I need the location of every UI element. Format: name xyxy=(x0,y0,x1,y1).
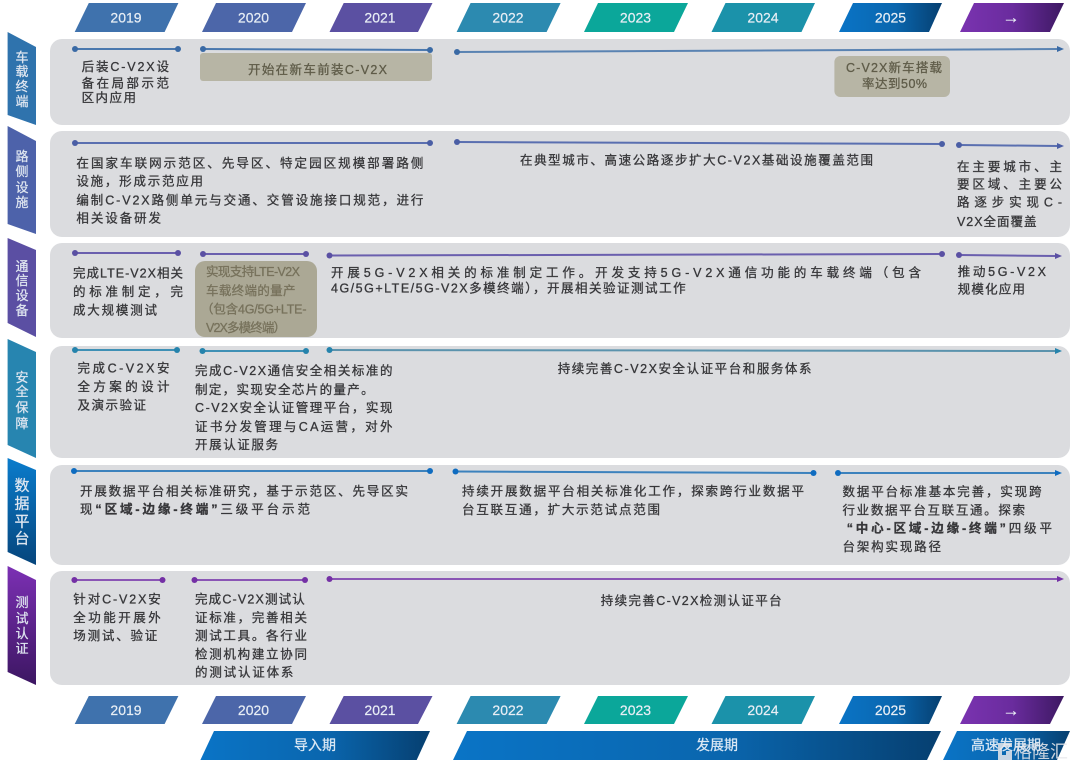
milestone box: 搭载率: 率达到50% xyxy=(862,76,927,91)
milestone box: 量产 xyxy=(195,261,317,337)
phase bar: 导入期: 导入期 xyxy=(294,737,336,753)
row: 路侧设施 xyxy=(8,126,1070,237)
bottom year header: 2019 xyxy=(110,702,142,718)
top year header: 2022 xyxy=(492,10,524,26)
text: 外场测试: 针对C-V2X安 xyxy=(73,592,161,606)
text: 安全方案: 完成C-V2X安 xyxy=(78,360,170,376)
text: 后装: 备在局部示范 xyxy=(82,76,169,90)
milestone box: 搭载率 xyxy=(834,56,950,97)
text: 安全标准与认证 xyxy=(195,363,393,452)
tab: 数据平台 xyxy=(8,458,36,565)
text: 安全方案 xyxy=(78,360,170,412)
text: 测试认证标准: 完成C-V2X测试认 xyxy=(195,592,305,606)
text: 5G-V2X: 4G/5G+LTE/5G-V2X多模终端），开展相关验证测试工作 xyxy=(331,280,686,296)
tab: 车载终端 xyxy=(8,32,36,125)
tab: 车载终端: 终 xyxy=(15,79,29,94)
tab: 安全保障: 全 xyxy=(15,384,29,399)
text: 持续完善检测: 持续完善C-V2X检测认证平台 xyxy=(601,593,782,608)
text: 安全方案: 及演示验证 xyxy=(78,398,146,412)
timeline arrow 2022 onward xyxy=(454,46,1064,55)
text: 标准化: 持续开展数据平台相关标准化工作，探索跨行业数据平 xyxy=(462,484,804,498)
phase bar: 导入期 xyxy=(200,731,430,760)
top year header xyxy=(75,3,1064,32)
panel background xyxy=(50,131,1070,237)
text: 安全标准与认证: 制定，实现安全芯片的量产。 xyxy=(195,382,374,397)
text: 三级平台 xyxy=(80,484,408,516)
timeline arrow onward xyxy=(956,252,1062,259)
text: 示范部署: 设施，形成示范应用 xyxy=(76,174,203,188)
text: 规模化 xyxy=(958,265,1047,296)
panel background xyxy=(50,39,1070,125)
top year header: 2019 xyxy=(110,10,142,26)
text: 外场测试: 全功能开展外 xyxy=(73,610,161,625)
timeline arrow 2021 onward xyxy=(326,347,1062,354)
phase bar: 高速发展期: 高速发展期 xyxy=(971,737,1041,753)
milestone box: 搭载率: C-V2X新车搭载 xyxy=(846,60,942,75)
timeline 2019-2021 xyxy=(72,140,433,146)
tab: 测试认证: 测 xyxy=(15,595,29,610)
text: 规模化: 推动5G-V2X xyxy=(958,265,1047,279)
text: 测试认证标准: 的测试认证体系 xyxy=(195,664,293,680)
text: 5G-V2X: 开展5G-V2X相关的标准制定工作。开发支持5G-V2X通信功能的车载终端（包含 xyxy=(331,265,921,280)
text: 外场测试: 场测试、验证 xyxy=(73,628,158,643)
text: LTE-V2X: 成大规模测试 xyxy=(73,302,157,318)
panel background xyxy=(50,465,1070,565)
text: 四级平台 xyxy=(842,484,1052,554)
bottom year header: 2020 xyxy=(238,702,269,718)
tab: 车载终端: 端 xyxy=(15,94,29,109)
tab: 路侧设施: 施 xyxy=(15,195,29,210)
text: 测试认证标准: 证标准，完善相关 xyxy=(195,610,307,625)
bottom year header: 2022 xyxy=(492,702,524,718)
text: 全面覆盖: V2X全面覆盖 xyxy=(957,214,1036,229)
timeline 2019 xyxy=(71,577,166,583)
text: 测试认证标准: 测试工具。各行业 xyxy=(195,628,307,643)
timeline 2020 xyxy=(200,251,309,257)
tab: 安全保障: 障 xyxy=(15,416,29,431)
text: 标准化: 台互联互通，扩大示范试点范围 xyxy=(462,502,660,517)
timeline arrow 2025 onward xyxy=(835,470,1062,476)
timeline 2019 xyxy=(72,347,180,353)
text: 安全标准与认证: 开展认证服务 xyxy=(195,437,278,452)
text: 后装 xyxy=(82,59,169,105)
text: 后装: 区内应用 xyxy=(82,90,136,105)
text: 全面覆盖: 路逐步实现C- xyxy=(957,194,1062,210)
tab: 车载终端: 车 xyxy=(15,50,29,65)
tab: 安全保障: 保 xyxy=(15,400,29,415)
tab: 通信设备: 设 xyxy=(15,288,29,303)
panel background xyxy=(50,571,1070,685)
top year header: 2025 xyxy=(875,10,906,26)
panel background xyxy=(50,346,1070,458)
text: 测试认证标准 xyxy=(195,592,307,680)
text: 外场测试 xyxy=(73,592,161,643)
tab: 数据平台: 台 xyxy=(14,530,30,548)
tab: 路侧设施: 路 xyxy=(15,149,29,164)
timeline 2020 xyxy=(200,348,309,354)
text: 示范部署: 在国家车联网示范区、先导区、特定园区规模部署路侧 xyxy=(76,156,423,170)
tab: 安全保障: 安 xyxy=(15,370,29,385)
text: 四级平台: “中心-区域-边缘-终端”四级平 xyxy=(847,520,1052,536)
row: 数据平台 xyxy=(8,458,1070,565)
text: LTE-V2X: 的标准制定，完 xyxy=(73,284,183,299)
milestone box: 量产: （包含4G/5G+LTE- xyxy=(201,302,306,316)
text: LTE-V2X: 完成LTE-V2X相关 xyxy=(73,266,183,280)
bottom year header: 2021 xyxy=(364,702,396,718)
timeline arrow 2021 onward xyxy=(326,576,1064,582)
tab: 路侧设施: 设 xyxy=(15,180,29,195)
tab: 路侧设施: 侧 xyxy=(15,164,29,179)
tab: 数据平台: 据 xyxy=(14,496,30,512)
tab: 通信设备 xyxy=(8,238,36,337)
watermark: 格隆汇: 格隆汇 xyxy=(1014,742,1068,762)
text: 四级平台: 行业数据平台互联互通。探索 xyxy=(842,502,1025,518)
text: 后装: 后装C-V2X设 xyxy=(82,59,169,74)
timeline 2021-2025 xyxy=(326,251,945,258)
bottom year header: → xyxy=(1002,701,1020,720)
text: 示范部署: 相关设备研发 xyxy=(76,210,161,226)
text: 安全标准与认证: 证书分发管理与CA运营，对外 xyxy=(195,419,393,434)
text: 示范部署 xyxy=(76,156,423,226)
text: 三级平台: 现“区域-边缘-终端”三级平台示范 xyxy=(80,502,310,516)
milestone box: 量产: 实现支持LTE-V2X xyxy=(206,264,301,279)
text: 持续完善安全: 持续完善C-V2X安全认证平台和服务体系 xyxy=(558,361,812,376)
tab: 车载终端: 载 xyxy=(15,64,29,79)
bottom year header: 2023 xyxy=(620,702,651,718)
text: 安全标准与认证: C-V2X安全认证管理平台，实现 xyxy=(195,400,392,415)
text: 测试认证标准: 检测机构建立协同 xyxy=(195,646,307,662)
milestone box: 前装 xyxy=(200,53,432,81)
tab: 通信设备: 信 xyxy=(15,273,29,288)
text: 四级平台: 台架构实现路径 xyxy=(842,539,941,554)
tab: 路侧设施 xyxy=(8,126,36,234)
tab: 数据平台: 数 xyxy=(14,478,30,494)
timeline 2020-2021 xyxy=(200,46,433,53)
timeline 2020 xyxy=(192,577,308,583)
text: LTE-V2X xyxy=(73,266,183,318)
text: 规模化: 规模化应用 xyxy=(958,282,1025,296)
timeline 2022-2024 xyxy=(452,468,816,476)
top year header: → xyxy=(1002,8,1020,27)
top year header: 2024 xyxy=(747,10,779,26)
milestone box: 量产: 车载终端的量产 xyxy=(206,283,296,298)
text: 全面覆盖: 要区域、主要公 xyxy=(957,178,1062,192)
row: 安全保障 xyxy=(8,339,1070,458)
timeline 2022-2025 xyxy=(454,139,945,147)
timeline 2019 xyxy=(72,250,181,256)
tab: 测试认证 xyxy=(8,566,36,685)
text: 全面覆盖 xyxy=(957,159,1062,229)
tab: 数据平台: 平 xyxy=(14,514,30,530)
top year header: 2023 xyxy=(620,10,651,26)
phase bar: 发展期 xyxy=(453,731,941,760)
row: 通信设备 xyxy=(8,238,1070,338)
phase bar: 高速发展期 xyxy=(943,731,1070,760)
panel background xyxy=(50,243,1070,338)
row: 测试认证 xyxy=(8,566,1070,685)
tab: 测试认证: 认 xyxy=(15,626,29,641)
text: 安全标准与认证: 完成C-V2X通信安全相关标准的 xyxy=(195,363,392,378)
tab: 通信设备: 备 xyxy=(15,303,29,318)
text: 示范部署: 编制C-V2X路侧单元与交通、交管设施接口规范，进行 xyxy=(76,192,423,208)
text: 三级平台: 开展数据平台相关标准研究，基于示范区、先导区实 xyxy=(80,484,408,498)
text: 安全方案: 全方案的设计 xyxy=(78,379,170,394)
row: 车载终端 xyxy=(8,32,1070,125)
phase bar: 发展期: 发展期 xyxy=(696,737,738,753)
tab: 测试认证: 证 xyxy=(15,641,29,656)
tab: 通信设备: 通 xyxy=(15,259,29,274)
tab: 安全保障 xyxy=(8,339,36,458)
milestone box: 前装: 开始在新车前装C-V2X xyxy=(248,62,388,77)
top year header: 2020 xyxy=(238,10,269,26)
timeline 2019-2021 xyxy=(71,468,433,474)
text: 扩大覆盖: 在典型城市、高速公路逐步扩大C-V2X基础设施覆盖范围 xyxy=(520,152,873,168)
text: 四级平台: 数据平台标准基本完善，实现跨 xyxy=(842,484,1042,499)
timeline 2019 xyxy=(72,46,181,52)
milestone box: 量产: V2X多模终端） xyxy=(206,320,286,335)
bottom year header xyxy=(75,696,1064,724)
text: 5G-V2X xyxy=(331,265,921,296)
bottom year header: 2024 xyxy=(747,702,779,718)
bottom year header: 2025 xyxy=(875,702,906,718)
timeline arrow onward xyxy=(956,142,1064,149)
top year header: 2021 xyxy=(364,10,396,26)
text: 标准化 xyxy=(462,484,804,517)
tab: 测试认证: 试 xyxy=(15,611,29,626)
text: 全面覆盖: 在主要城市、主 xyxy=(957,159,1062,174)
